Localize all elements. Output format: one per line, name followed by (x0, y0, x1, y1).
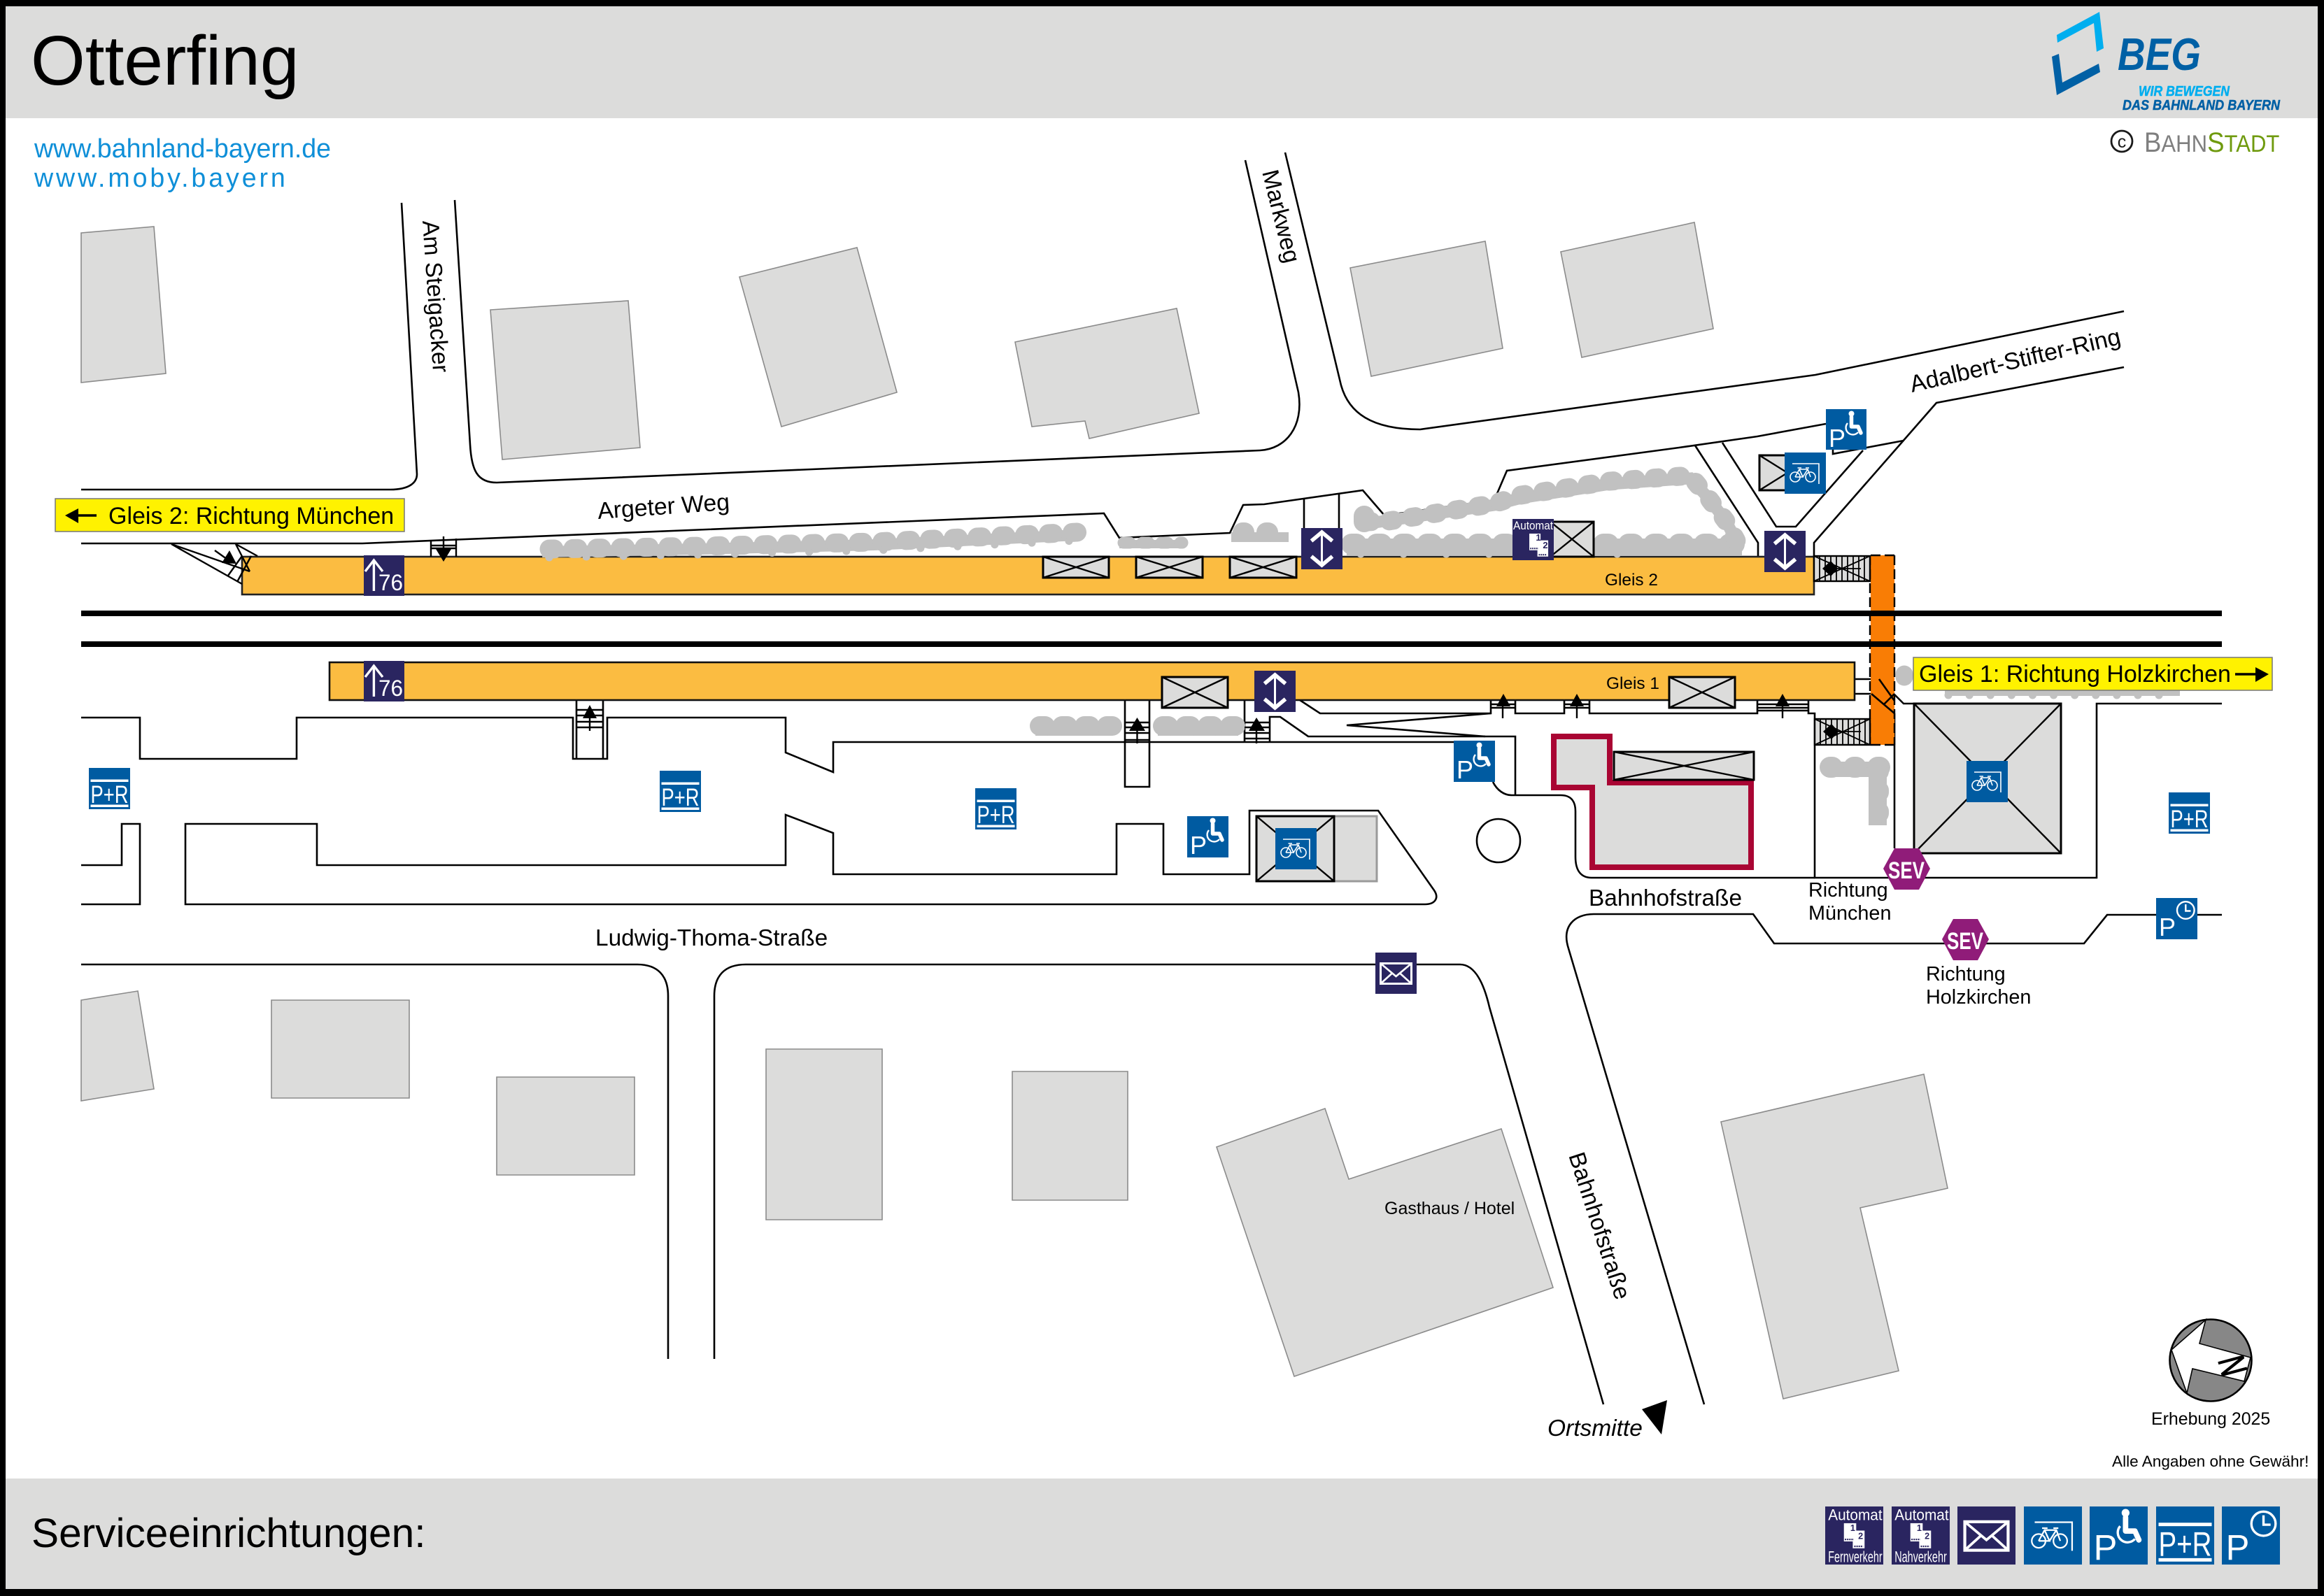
north arrow: N (2211, 1351, 2255, 1380)
sign: P+R 3: P+R (977, 801, 1014, 829)
sign: parking wheelchair centre (1187, 816, 1228, 860)
SEV stop Richtung Holzkirchen (1942, 919, 1989, 960)
tracks (81, 611, 2222, 647)
SEV stop Richtung Holzkirchen: SEV (1947, 928, 1983, 955)
website links (34, 134, 331, 192)
BEG logo: DAS BAHNLAND BAYERN (2123, 98, 2280, 113)
sign: P+R 1: P+R (91, 781, 129, 808)
sign: P+R east (2169, 792, 2210, 834)
legend: short stay parking (2222, 1506, 2280, 1567)
roundabout island (1477, 819, 1520, 862)
sign: short stay parking (2156, 898, 2197, 941)
label Ortsmitte with arrow: Ortsmitte (1547, 1416, 1643, 1441)
sign: ticket machine: 2 (1543, 540, 1548, 550)
legend: Automat Fernverkehr: 2 (1858, 1531, 1863, 1541)
sign: parking wheelchair north: P (1829, 424, 1845, 453)
website links: www.bahnland-bayern.de (34, 134, 331, 163)
legend: Automat Fernverkehr (1825, 1506, 1883, 1565)
sign: parking wheelchair east (1454, 741, 1495, 784)
footer heading: Serviceeinrichtungen: (31, 1511, 425, 1556)
legend: Automat Nahverkehr: Nahverkehr (1894, 1548, 1947, 1565)
underpass: orange (1870, 555, 1894, 745)
sign: P+R 2: P+R (662, 784, 700, 811)
shelter boxes platform 2 (1043, 522, 1594, 578)
bike shelter near P (1256, 816, 1377, 881)
sign: ticket machine: 1 (1536, 532, 1541, 543)
street label Adalbert-Stifter-Ring: Adalbert-Stifter-Ring (1907, 323, 2123, 398)
sign: 76 platform 2: 76 (378, 570, 403, 595)
survey note: Erhebung 2025 (2151, 1409, 2270, 1429)
BEG logo (2052, 12, 2280, 113)
shelter boxes platform 1 (1162, 677, 1735, 708)
legend: P+R (2156, 1506, 2214, 1565)
label Richtung München: München (1808, 902, 1891, 925)
legend icons (1825, 1506, 2280, 1567)
legend: Automat Nahverkehr: 2 (1925, 1531, 1929, 1541)
legend: mailbox (1957, 1506, 2015, 1565)
sign: mailbox (1375, 953, 1417, 994)
sign: bike centre (1275, 828, 1317, 869)
sign: bike north (1785, 453, 1826, 494)
legend: Automat Nahverkehr: 1 (1917, 1523, 1922, 1533)
sign: bike large (1967, 761, 2008, 802)
stairs: platform 1 east A (1491, 694, 1515, 718)
sign: P+R 1 (89, 768, 130, 809)
legend: disabled parking (2090, 1506, 2148, 1567)
SEV stop Richtung München: SEV (1888, 857, 1925, 884)
stairs: platform 1 ramp A (1125, 718, 1149, 743)
sign: P+R east: P+R (2170, 806, 2208, 833)
street label Argeter Weg: Argeter Weg (597, 489, 730, 525)
platform label Gleis 2: Gleis 2 (1605, 571, 1658, 590)
legend: disabled parking: P (2094, 1527, 2117, 1567)
stairs: platform 1 east B (1564, 694, 1589, 718)
direction box: Gleis 2: Gleis 2: Richtung München (108, 503, 394, 529)
station building (red outline) (1554, 736, 1754, 867)
legend: Automat Fernverkehr: Fernverkehr (1828, 1548, 1883, 1565)
sign: parking wheelchair north (1826, 409, 1866, 453)
copyright BahnStadt: BAHNSTADT (2144, 127, 2280, 158)
disclaimer: Alle Angaben ohne Gewähr! (2112, 1453, 2309, 1470)
legend: Automat Fernverkehr: 1 (1850, 1523, 1855, 1533)
direction box: Gleis 1: Gleis 1: Richtung Holzkirchen (1919, 661, 2231, 687)
BEG logo: BEG (2118, 29, 2201, 80)
legend: short stay parking: P (2226, 1527, 2249, 1567)
hedges (542, 476, 2180, 825)
sign: ticket machine (1512, 519, 1554, 560)
label Richtung München: Richtung (1808, 879, 1888, 902)
sign: access up-down platform 2 mid (1301, 528, 1342, 569)
platform label Gleis 1: Gleis 1 (1606, 674, 1659, 693)
sign: 76 platform 1 (364, 661, 404, 701)
direction box: Gleis 2 (55, 499, 404, 532)
street label Ludwig-Thoma-Straße: Ludwig-Thoma-Straße (595, 925, 828, 951)
sign: ticket machine: Automat (1513, 520, 1553, 532)
sign: access up-down platform 2 east (1764, 531, 1806, 572)
platform: Gleis 2 (242, 557, 1814, 594)
legend: Automat Nahverkehr: Automat (1894, 1506, 1949, 1524)
street label Am Steigacker: Am Steigacker (417, 220, 453, 373)
bike shelter large (1914, 704, 2061, 853)
street label Bahnhofstraße vertical: Bahnhofstraße (1563, 1149, 1635, 1303)
label Richtung München (1808, 879, 1891, 925)
stairs: west end of platform 2 (171, 544, 257, 584)
road outlines (81, 152, 2222, 1404)
sign: P+R 3 (975, 788, 1016, 829)
buildings (81, 222, 1948, 1399)
sign: parking wheelchair centre: P (1190, 831, 1207, 860)
footer band (6, 1479, 2318, 1589)
sign: parking wheelchair east: P (1457, 755, 1473, 784)
label Gasthaus / Hotel: Gasthaus / Hotel (1384, 1199, 1515, 1218)
header band (6, 6, 2318, 118)
street label Markweg: Markweg (1256, 167, 1305, 266)
sign: short stay parking: P (2159, 913, 2176, 941)
stairs: platform 1 west (576, 705, 603, 731)
label Richtung Holzkirchen (1926, 963, 2031, 1009)
sign: P+R 2 (660, 771, 701, 812)
label Ortsmitte with arrow (1547, 1400, 1667, 1441)
legend: Automat Fernverkehr: Automat (1828, 1506, 1883, 1524)
title: Otterfing (31, 22, 299, 100)
stairs: platform 1 ramp B (1245, 718, 1270, 743)
legend: Automat Nahverkehr (1892, 1506, 1950, 1565)
stairs to underpass north (1814, 556, 1870, 581)
BEG logo: WIR BEWEGEN (2139, 84, 2230, 99)
sign: 76 platform 1: 76 (378, 676, 403, 701)
street label Bahnhofstraße horizontal: Bahnhofstraße (1589, 885, 1742, 911)
north arrow (2170, 1319, 2255, 1402)
platform: Gleis 1 (330, 662, 1855, 700)
stairs to underpass south (1815, 719, 1870, 745)
bike shelter north (1759, 455, 1815, 490)
sign: access up-down platform 1 (1254, 671, 1296, 712)
website links: www.moby.bayern (34, 163, 288, 192)
sign: 76 platform 2 (364, 555, 404, 596)
label Richtung Holzkirchen: Holzkirchen (1926, 986, 2031, 1009)
stairs: platform 1 east C (1757, 694, 1808, 718)
copyright BahnStadt: c (2118, 132, 2126, 152)
label Richtung Holzkirchen: Richtung (1926, 963, 2006, 985)
legend: bike (2024, 1506, 2082, 1565)
SEV stop Richtung München (1883, 848, 1930, 890)
legend: P+R: P+R (2159, 1525, 2211, 1563)
stairs: platform 2 (431, 536, 456, 562)
